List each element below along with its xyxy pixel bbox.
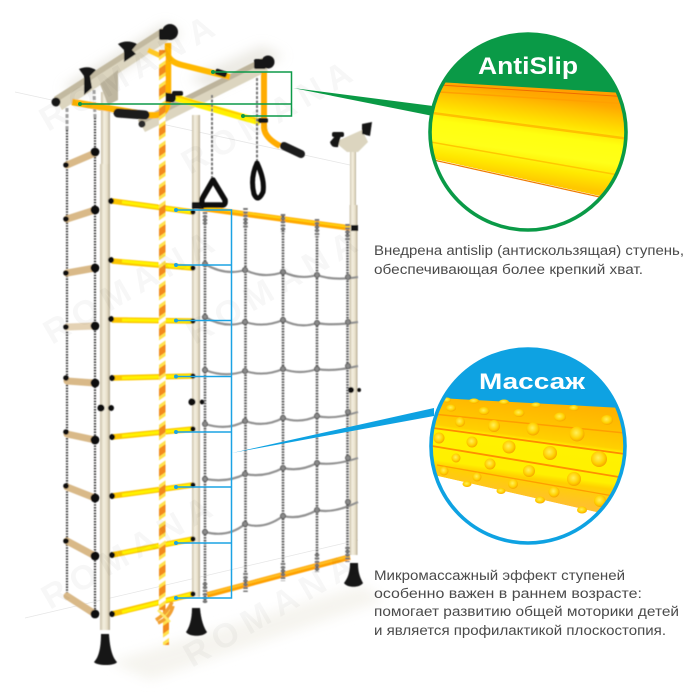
text block: massage description: Микромассажный эффект ступеней xyxy=(374,568,625,583)
watermarks ROMANA: ROMANA xyxy=(175,54,359,182)
ceiling mounts xyxy=(52,24,358,231)
text block: massage description: особенно важен в раннем возрасте: xyxy=(374,586,642,601)
text block: antislip description: Внедрена antislip (антискользящая) ступень, xyxy=(374,243,684,258)
yellow top bars and handles xyxy=(72,43,301,154)
panel: massage callout circle xyxy=(429,347,627,545)
top frame beams xyxy=(54,28,268,132)
orange net bars xyxy=(200,207,350,595)
yellow rungs xyxy=(112,201,193,614)
watermarks ROMANA: ROMANA xyxy=(37,224,221,352)
climbing net xyxy=(202,208,358,603)
watermarks ROMANA: ROMANA xyxy=(180,224,364,352)
watermarks ROMANA: ROMANA xyxy=(35,489,219,617)
heading: Массаж: Массаж xyxy=(479,369,586,394)
shadows and wall lines xyxy=(15,24,385,680)
vertical posts xyxy=(100,92,358,630)
watermarks ROMANA: ROMANA xyxy=(33,9,221,139)
blue pointer lines xyxy=(174,208,434,600)
text block: massage description xyxy=(374,568,679,638)
right ceiling bracket xyxy=(330,122,372,152)
left rope ladder xyxy=(63,90,99,618)
watermarks ROMANA: ROMANA xyxy=(177,547,361,675)
heading: AntiSlip: AntiSlip xyxy=(478,53,578,80)
climbing frame xyxy=(52,24,372,665)
text block: massage description: помогает развитию общей моторики детей xyxy=(374,604,679,619)
text block: antislip description xyxy=(374,243,684,277)
text block: massage description: и является профилактикой плоскостопия. xyxy=(374,623,666,638)
watermarks ROMANA xyxy=(33,9,364,675)
striped rope xyxy=(156,50,173,645)
green pointer lines xyxy=(78,70,433,118)
rubber feet xyxy=(94,563,363,665)
panel: AntiSlip callout circle xyxy=(420,30,640,240)
gymnastic rings xyxy=(202,78,263,205)
text block: antislip description: обеспечивающая более крепкий хват. xyxy=(374,262,643,277)
